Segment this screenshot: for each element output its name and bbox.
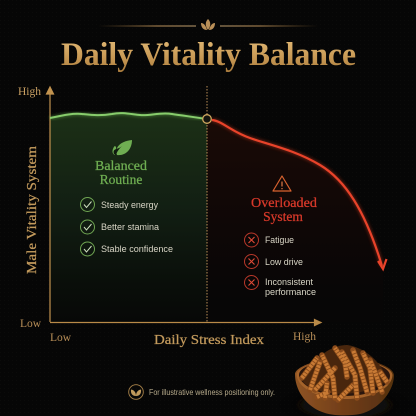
item: steady energy: Steady energy xyxy=(101,200,158,211)
icon: warning triangle xyxy=(273,176,291,191)
header ornament xyxy=(98,19,318,30)
cordyceps pile xyxy=(303,345,388,394)
heading: Overloaded xyxy=(251,195,317,210)
panel: balanced routine xyxy=(80,140,173,256)
threshold marker xyxy=(203,115,211,123)
axis label: x high: High xyxy=(293,331,316,343)
item: stable confidence: Stable confidence xyxy=(101,244,173,255)
item: inconsistent performance: Inconsistent xyxy=(265,277,313,288)
y axis xyxy=(46,87,54,322)
chart xyxy=(46,86,386,326)
item: inconsistent performance xyxy=(244,276,316,298)
item: inconsistent performance: performance xyxy=(265,287,316,298)
threshold line xyxy=(206,86,208,322)
red zone fill xyxy=(207,119,383,322)
red arrow head xyxy=(378,259,386,269)
axis label: y low: Low xyxy=(20,318,42,330)
illustration: bowl of cordyceps xyxy=(273,345,416,416)
footer note xyxy=(129,385,275,399)
heading: Balanced xyxy=(95,158,147,173)
bowl xyxy=(295,358,394,415)
red curve xyxy=(212,120,382,266)
footer note: For illustrative wellness positioning only. xyxy=(149,388,275,397)
axis label: x low: Low xyxy=(50,332,72,344)
item: low drive: Low drive xyxy=(265,257,303,268)
axis label: y high: High xyxy=(18,86,41,98)
panel: balanced routine: Routine xyxy=(100,172,142,187)
icon: leaf badge xyxy=(129,385,143,399)
green curve xyxy=(50,113,203,118)
title: Daily Vitality Balance xyxy=(61,37,356,73)
y axis title: Male Vitality System xyxy=(25,146,40,274)
green zone fill xyxy=(50,113,207,322)
panel: overloaded system: System xyxy=(263,209,303,224)
x axis xyxy=(50,320,321,326)
icon: leaf xyxy=(113,140,132,155)
panel: overloaded system xyxy=(244,176,317,298)
item: fatigue: Fatigue xyxy=(265,235,294,246)
item: better stamina: Better stamina xyxy=(101,222,160,233)
x axis title: Daily Stress Index xyxy=(154,333,264,348)
